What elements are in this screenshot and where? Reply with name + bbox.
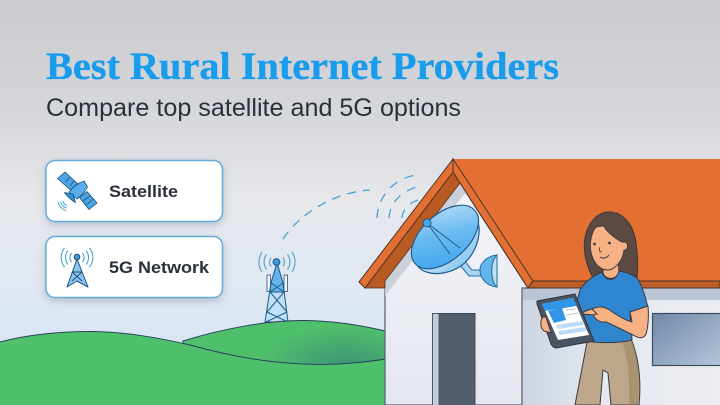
hand holding tablet: [541, 317, 551, 333]
card: 5G network: [46, 236, 222, 298]
gable shadow: [385, 183, 466, 296]
dish bowl: [417, 212, 479, 274]
shirt: [576, 271, 648, 343]
face details: [594, 242, 610, 258]
roof right trim: [453, 159, 533, 288]
window: [652, 314, 720, 366]
icon: small tower: [67, 254, 88, 287]
satellite dish: [400, 193, 497, 287]
card: satellite: [46, 160, 222, 222]
trousers: [575, 339, 640, 405]
icon: small tower signal: [61, 248, 93, 267]
tower lattice: [265, 263, 288, 322]
finger on tablet: [583, 309, 597, 315]
roof eave: [528, 281, 720, 288]
eave shadow: [522, 288, 720, 300]
label: 5G Network: 5G Network: [109, 258, 210, 277]
front hill: [0, 332, 386, 405]
icon: satellite: [58, 172, 97, 210]
tower: [259, 252, 295, 322]
signal arcs near roof: [377, 175, 418, 218]
dish feed arms: [427, 223, 460, 254]
tablet: [537, 294, 594, 348]
front gable wall: [385, 183, 528, 405]
roof underside: [365, 172, 460, 288]
label: Satellite: Satellite: [109, 182, 178, 201]
house: [359, 159, 720, 405]
door: [432, 314, 475, 405]
dish face: [400, 193, 490, 281]
subtitle: Compare top satellite and 5G options: [46, 94, 461, 122]
neck and face: [603, 258, 619, 278]
wall mount: [460, 260, 486, 276]
dashed signal arc: [283, 190, 370, 239]
title: Best Rural Internet Providers: [46, 45, 559, 88]
hair: [584, 212, 638, 278]
tower signal: [259, 252, 295, 272]
right wall: [522, 288, 720, 405]
dish feed: [423, 219, 431, 227]
roof main: [453, 159, 720, 281]
person: [537, 212, 648, 405]
icon: satellite signal: [58, 201, 67, 210]
back hill: [183, 320, 385, 365]
arm: [583, 306, 648, 338]
roof left trim: [359, 159, 453, 288]
